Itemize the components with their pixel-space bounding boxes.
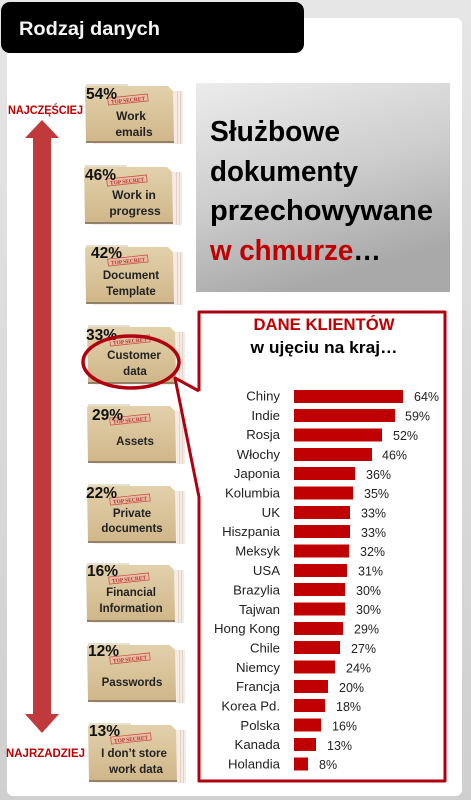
bar chart: countries: 13% bbox=[327, 739, 352, 753]
folder: I don't store work data bbox=[88, 723, 186, 783]
folder: Work in progress bbox=[84, 165, 182, 225]
folder: Document Template: Document bbox=[103, 270, 159, 282]
bar chart: countries: Chile bbox=[250, 640, 280, 656]
callout frame with pointer bbox=[175, 312, 445, 781]
folder: Work emails: Work bbox=[116, 109, 146, 123]
bar chart: countries: Meksyk bbox=[235, 544, 280, 558]
bar chart: countries: 32% bbox=[360, 545, 385, 559]
folder: Financial Information: Information bbox=[99, 603, 163, 615]
bar chart: countries bbox=[214, 388, 439, 772]
bar chart: countries: Kolumbia bbox=[225, 486, 281, 500]
bar chart: countries: 27% bbox=[351, 642, 376, 656]
label: least often: NAJRZADZIEJ bbox=[6, 748, 85, 760]
folder: Private documents: Private bbox=[113, 508, 151, 520]
folder: I don't store work data: work data bbox=[108, 764, 163, 776]
bar chart: countries: Hiszpania bbox=[222, 524, 281, 539]
bar chart: countries: Tajwan bbox=[239, 602, 280, 617]
bar chart: countries: Hong Kong bbox=[214, 621, 280, 636]
bar chart: countries: 31% bbox=[358, 564, 383, 578]
bar chart: countries: Francja bbox=[236, 679, 281, 694]
headline box: przechowywane bbox=[210, 195, 433, 227]
folder: Work in progress: Work in bbox=[112, 188, 156, 202]
bar chart: countries: 36% bbox=[366, 468, 391, 482]
double arrow: frequency scale bbox=[25, 120, 59, 733]
callout heading: DANE KLIENTÓW bbox=[254, 315, 395, 334]
bar chart: countries: 52% bbox=[393, 429, 418, 443]
folder: Customer data bbox=[86, 325, 185, 385]
title bar bbox=[1, 2, 304, 53]
bar chart: countries: 29% bbox=[354, 622, 379, 636]
bar chart: countries: 64% bbox=[414, 390, 439, 404]
bar chart: countries: 18% bbox=[336, 700, 361, 714]
folder: Passwords: Passwords bbox=[102, 677, 162, 689]
folder: Work emails: emails bbox=[115, 125, 153, 139]
headline box bbox=[196, 83, 450, 292]
bar chart: countries: 20% bbox=[339, 681, 364, 695]
folder: Assets bbox=[87, 404, 185, 464]
callout heading bbox=[249, 315, 398, 357]
folder: Financial Information: 16% bbox=[87, 563, 118, 580]
folder: I don't store work data: I don’t store bbox=[101, 748, 167, 760]
bar chart: countries: UK bbox=[262, 505, 280, 520]
bar chart: countries: 30% bbox=[356, 603, 381, 617]
bar chart: countries: Włochy bbox=[237, 447, 280, 462]
folder: Private documents bbox=[86, 484, 185, 544]
bar chart: countries: 30% bbox=[356, 584, 381, 598]
bar chart: countries: 59% bbox=[405, 410, 430, 424]
bar chart: countries: Korea Pd. bbox=[221, 698, 280, 714]
folder: Assets: Assets bbox=[116, 436, 154, 448]
highlight ellipse bbox=[83, 336, 179, 388]
folder: Assets: 29% bbox=[92, 407, 123, 424]
folder: Private documents: documents bbox=[101, 523, 163, 535]
bar chart: countries: Chiny bbox=[246, 388, 280, 404]
folder: I don't store work data: 13% bbox=[89, 723, 120, 740]
folder: Work in progress: 46% bbox=[85, 167, 116, 184]
folder: Document Template bbox=[85, 245, 183, 305]
bar chart: countries: Polska bbox=[240, 718, 281, 733]
bar chart: countries: USA bbox=[253, 563, 280, 578]
bar chart: countries: Kanada bbox=[235, 737, 281, 752]
folder: Financial Information bbox=[86, 563, 184, 623]
bar chart: countries: 8% bbox=[319, 758, 337, 772]
headline box: Służbowe bbox=[210, 116, 340, 148]
bar chart: countries: 46% bbox=[382, 448, 407, 462]
bar chart: countries: 33% bbox=[361, 526, 386, 540]
bar chart: countries: Niemcy bbox=[236, 660, 280, 675]
label: most often: NAJCZĘŚCIEJ bbox=[8, 104, 83, 117]
folder: Customer data: Customer bbox=[107, 350, 161, 362]
bar chart: countries: Indie bbox=[251, 408, 280, 423]
headline box: w chmurze… bbox=[209, 235, 381, 267]
title bar: Rodzaj danych bbox=[19, 19, 160, 40]
folder: Passwords bbox=[87, 643, 185, 703]
folder: Financial Information: Financial bbox=[106, 587, 156, 599]
bar chart: countries: Brazylia bbox=[233, 582, 281, 598]
folder: Work emails: 54% bbox=[86, 86, 117, 103]
bar chart: countries: Japonia bbox=[234, 466, 281, 481]
folder: Document Template: 42% bbox=[91, 245, 122, 262]
bar chart: countries: Rosja bbox=[246, 427, 281, 442]
folder: Work emails bbox=[85, 84, 183, 144]
bar chart: countries: 24% bbox=[346, 662, 371, 676]
folder: Customer data: data bbox=[123, 366, 147, 378]
folder: Work in progress: progress bbox=[109, 204, 161, 218]
folder: Document Template: Template bbox=[106, 286, 156, 298]
bar chart: countries: 16% bbox=[332, 720, 357, 734]
headline box: dokumenty bbox=[210, 156, 358, 188]
callout heading: w ujęciu na kraj… bbox=[249, 339, 398, 357]
bar chart: countries: Holandia bbox=[228, 756, 281, 772]
folder: Passwords: 12% bbox=[88, 643, 119, 660]
bar chart: countries: 35% bbox=[364, 487, 389, 501]
folder: Private documents: 22% bbox=[86, 485, 117, 502]
folder: Customer data: 33% bbox=[86, 327, 117, 344]
bar chart: countries: 33% bbox=[361, 506, 386, 520]
